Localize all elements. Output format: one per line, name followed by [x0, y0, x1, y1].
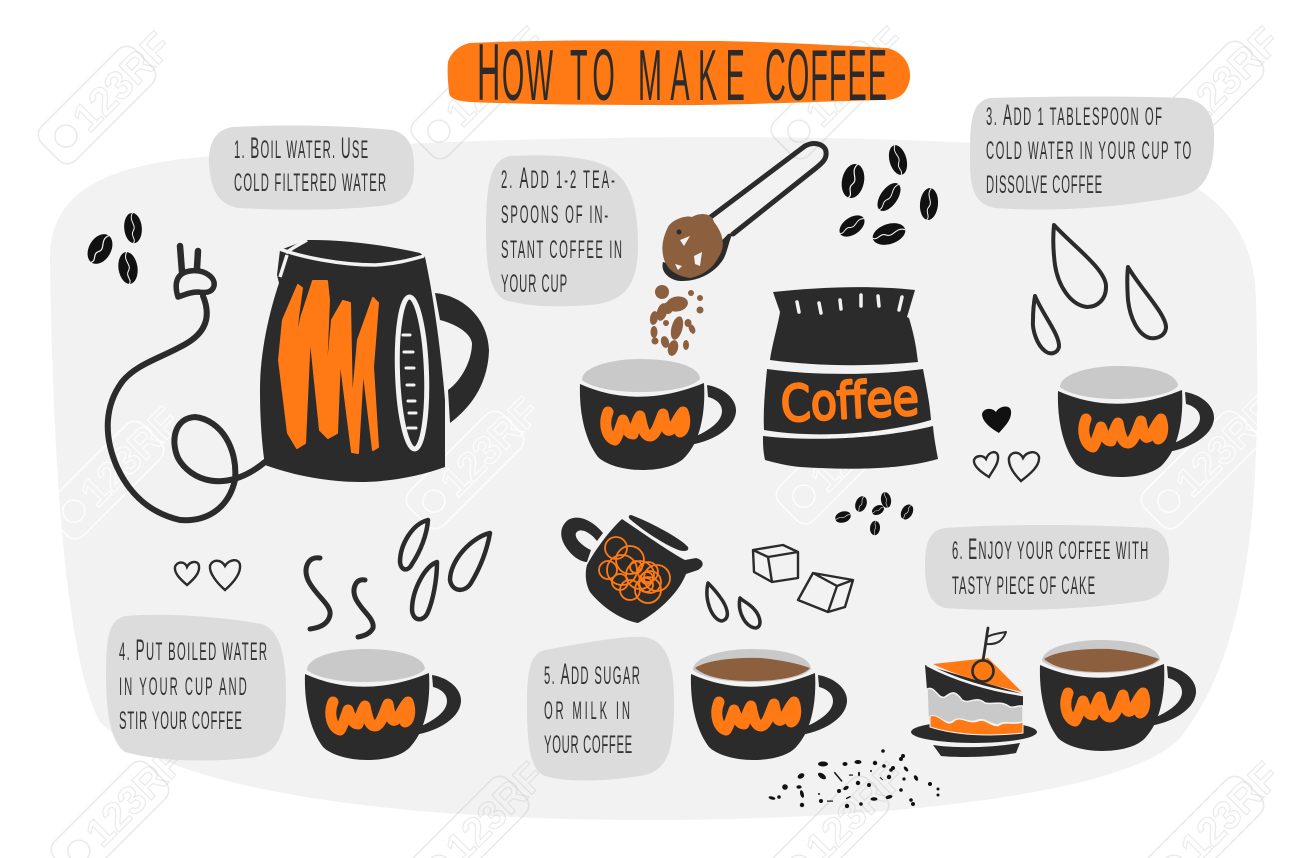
text: 123RF: [432, 389, 548, 505]
icon: sprinkles: [768, 749, 940, 808]
step 2 label: [486, 155, 638, 306]
icon: cake slice: [911, 628, 1037, 757]
background panel: [50, 137, 1257, 820]
title: HOW: [477, 28, 553, 118]
icon: falling coffee grains: [649, 285, 704, 357]
step 2 label: SPOONS OF IN-: [501, 201, 608, 229]
icon: cup step 3: [1058, 366, 1214, 477]
icon: coffee bag: [763, 287, 938, 469]
step 3 label: 3. ADD 1 TABLESPOON OF: [986, 98, 1162, 131]
icon: sugar cubes: [753, 545, 853, 612]
icon: hearts step 4: [175, 560, 240, 590]
step 4 label: IN YOUR CUP AND: [119, 673, 247, 701]
step 2 label: 2. ADD 1-2 TEA-: [501, 161, 615, 194]
title: TO: [570, 34, 615, 116]
icon: cup step 2: [580, 359, 736, 470]
text: 123RF: [72, 399, 188, 515]
icon: kettle: [260, 240, 489, 482]
text: 123RF: [802, 384, 918, 500]
step 4 label: 4. PUT BOILED WATER: [119, 633, 267, 666]
title: COFFEE: [765, 34, 887, 116]
step 6 label: TASTY PIECE OF CAKE: [952, 572, 1095, 600]
text: 123RF: [1167, 389, 1283, 505]
step 5 label: OR MILK IN: [544, 697, 630, 725]
icon: coffee beans top left: [82, 212, 143, 285]
step 4 label: [106, 615, 286, 760]
icon: hearts step 3: [974, 407, 1039, 481]
title: MAKE: [638, 34, 745, 116]
step 2 label: STANT COFFEE IN: [501, 236, 622, 264]
icon: coffee beans top right: [836, 143, 939, 249]
icon: spoon with coffee: [662, 144, 826, 281]
step 1 label: COLD FILTERED WATER: [234, 169, 386, 197]
step 5 label: 5. ADD SUGAR: [544, 657, 640, 690]
icon: tipped cup with scribble: [561, 515, 703, 623]
icon: cup step 6: [1040, 640, 1196, 751]
step 1 label: 1. BOIL WATER. USE: [234, 131, 368, 164]
icon: power cord and plug: [108, 246, 265, 520]
step 3 label: [970, 96, 1214, 210]
step 4 label: STIR YOUR COFFEE: [119, 707, 242, 735]
step 6 label: [925, 525, 1169, 610]
icon: coffee bag: Coffee: [779, 368, 920, 434]
icon: cup step 4: [305, 649, 461, 760]
icon: water drops step 3: [1033, 225, 1166, 353]
step 1 label: [209, 126, 414, 210]
text: 123RF: [77, 739, 193, 855]
step 6 label: 6. ENJOY YOUR COFFEE WITH: [952, 532, 1148, 565]
step 2 label: YOUR CUP: [501, 270, 567, 298]
title: [448, 28, 910, 118]
text: 123RF: [64, 24, 180, 140]
icon: steam: [306, 558, 373, 637]
text: 123RF: [797, 19, 913, 135]
step 5 label: YOUR COFFEE: [544, 731, 632, 759]
icon: milk drops: [707, 583, 760, 628]
icon: cup step 5: [691, 649, 847, 760]
coffee in cup: [1044, 649, 1159, 672]
step 3 label: COLD WATER IN YOUR CUP TO: [986, 137, 1191, 165]
text: 123RF: [1172, 19, 1288, 135]
coffee in cup: [695, 658, 810, 681]
step 5 label: [527, 637, 674, 780]
icon: coffee beans small: [834, 491, 916, 536]
icon: water drops step 4: [400, 520, 490, 619]
step 3 label: DISSOLVE COFFEE: [986, 171, 1102, 199]
text: 123RF: [437, 19, 553, 135]
